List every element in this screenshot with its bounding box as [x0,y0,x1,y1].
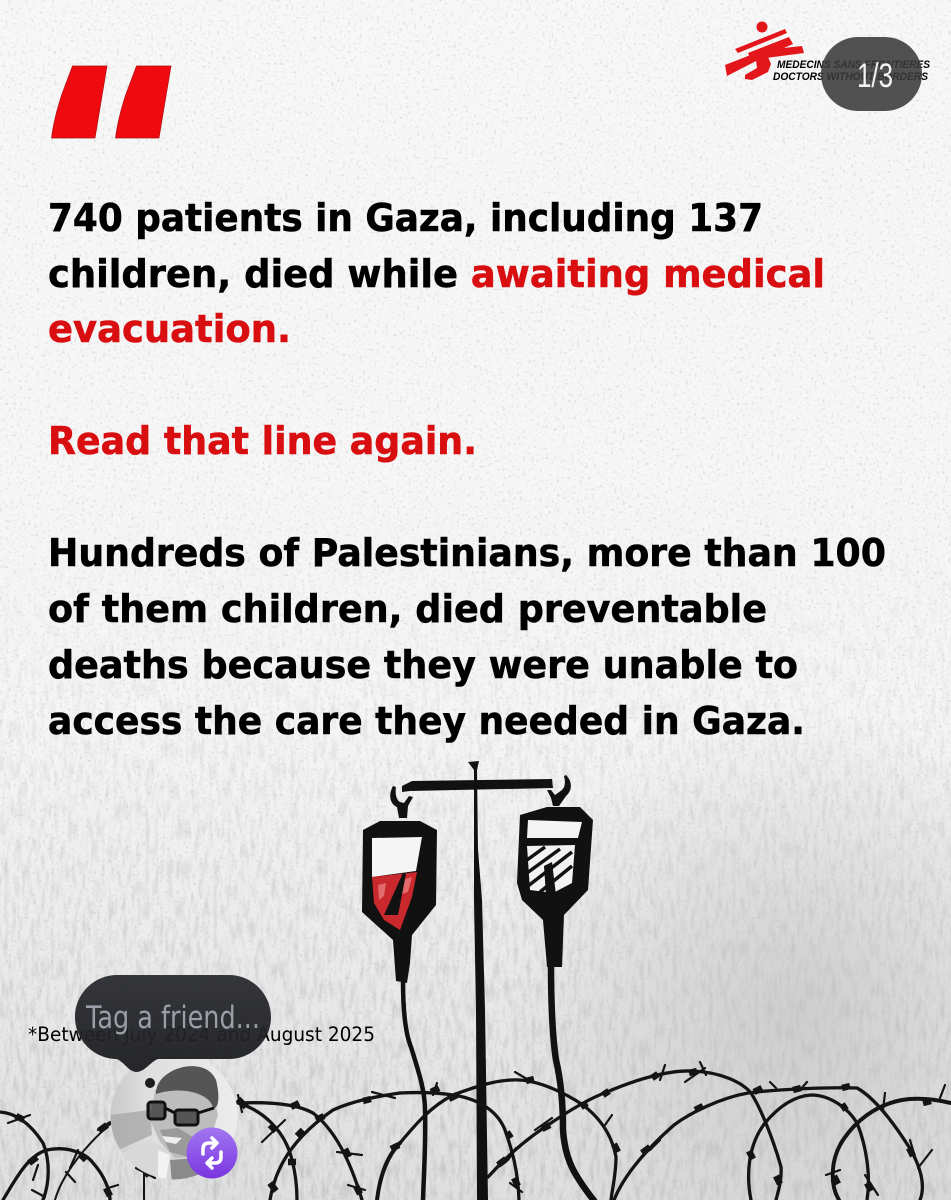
statement: preventable deaths: of them children, died preventable [48,587,767,631]
MSF logo [725,22,931,83]
statement: patients died awaiting evacuation: children, died while awaiting medical [48,252,825,296]
tag-a-friend speech bubble [75,975,271,1072]
footnote: *Between July 2024 and August 2025 [28,1023,375,1046]
statement: preventable deaths: Hundreds of Palestinians, more than 100 [48,531,886,575]
illustration: IV stand with two bags [362,761,595,1200]
logo wordmark: MEDECINS SANS FRONTIERES [777,59,931,71]
portrait: background blur [110,1110,152,1150]
statement: patients died awaiting evacuation [48,196,825,351]
logo emblem: running figure [725,22,804,80]
IV pole and crossbar [390,761,571,1200]
statement: preventable deaths: deaths because they were unable to [48,643,798,687]
barbed wire [0,1062,951,1200]
portrait: shoulders [136,1146,187,1179]
statement: patients died awaiting evacuation: 740 patients in Gaza, including 137 [48,196,763,240]
wire barbs [8,1062,945,1197]
right IV bag with hatched fill [517,807,593,967]
left IV bag with red fluid [362,821,437,983]
opening quotation mark [52,66,171,138]
emphasis line: Read that line again. [48,419,477,463]
logo wordmark: DOCTORS WITHOUT BORDERS [773,71,929,83]
statement: preventable deaths: access the care they needed in Gaza. [48,699,805,743]
avatar photo [110,1059,238,1180]
repost arrows icon [203,1138,221,1168]
slide counter pill [821,37,922,111]
slide counter pill: 1/3 [857,57,893,95]
portrait: face [150,1090,218,1158]
repost badge [186,1128,238,1178]
tag-a-friend speech bubble: Tag a friend... [85,1000,260,1036]
portrait: beard [160,1128,192,1156]
right IV tube [551,965,595,1200]
wire barb knots [16,1071,931,1196]
statement: patients died awaiting evacuation: evacuation. [48,307,291,351]
logo wordmark [773,59,931,83]
avatar status dot [145,1078,155,1088]
statement: preventable deaths [48,531,886,743]
left IV tube [403,980,425,1200]
portrait: hair [156,1066,218,1108]
portrait: glasses [148,1102,214,1125]
